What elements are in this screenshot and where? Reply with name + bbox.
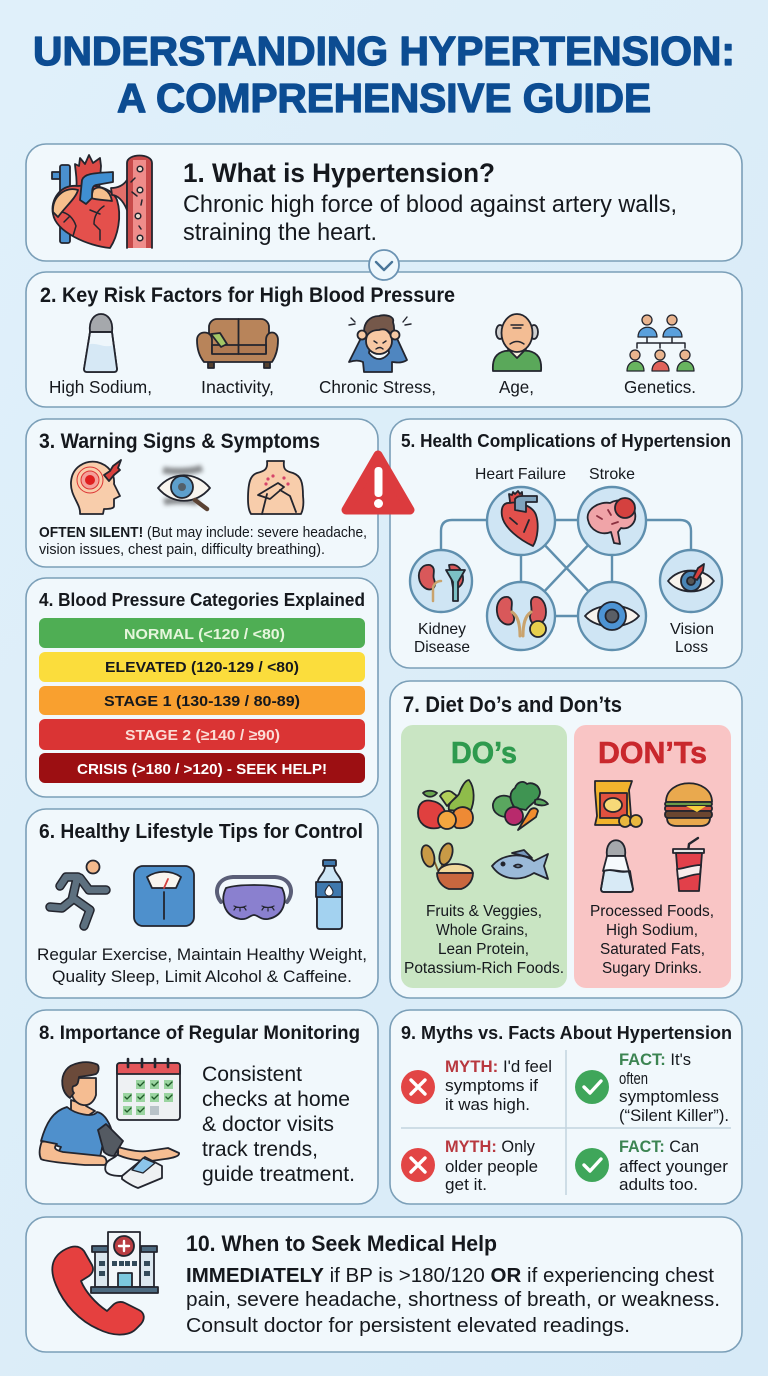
icon: person taking blood pressure bbox=[40, 1062, 179, 1188]
myth 2: older people bbox=[445, 1157, 538, 1176]
don'ts list: Processed Foods, bbox=[590, 903, 714, 920]
icon: chest pain bbox=[248, 461, 303, 514]
complication labels: Heart Failure bbox=[475, 466, 566, 483]
category bar: crisis bbox=[39, 753, 365, 783]
panel: key risk factors bbox=[26, 272, 742, 407]
category bar: stage 1: STAGE 1 (130-139 / 80-89) bbox=[104, 693, 300, 710]
title: A COMPREHENSIVE GUIDE bbox=[117, 75, 651, 121]
fact 1: FACT: It's bbox=[619, 1050, 691, 1069]
do's list: Fruits & Veggies, bbox=[426, 903, 542, 920]
node: eye bbox=[578, 582, 646, 650]
text block: Chronic high force of blood against artery walls, bbox=[183, 191, 677, 218]
heading: 10. When to Seek Medical Help bbox=[186, 1231, 497, 1256]
text block bbox=[183, 191, 677, 246]
icon: warning triangle bbox=[346, 455, 410, 510]
do's list bbox=[404, 903, 564, 977]
text block bbox=[39, 525, 367, 558]
panel: healthy lifestyle tips bbox=[26, 809, 378, 998]
icon: water bottle bbox=[316, 860, 342, 929]
node: kidneys bbox=[487, 582, 555, 650]
category bar: normal: NORMAL (<120 / <80) bbox=[124, 626, 285, 643]
heading: 5. Health Complications of Hypertension bbox=[401, 430, 731, 451]
text block: & doctor visits bbox=[202, 1113, 334, 1136]
complication labels bbox=[414, 466, 714, 656]
text block bbox=[186, 1265, 720, 1337]
icon: calendar bbox=[117, 1059, 180, 1120]
text block bbox=[37, 945, 367, 986]
icon: stressed person bbox=[349, 315, 411, 372]
fact 1: often bbox=[619, 1069, 648, 1088]
heading: 2. Key Risk Factors for High Blood Pressure bbox=[40, 284, 455, 307]
do's column bbox=[401, 725, 567, 988]
icon: vegetables bbox=[493, 782, 548, 830]
text block: straining the heart. bbox=[183, 219, 377, 246]
icon: burger bbox=[665, 783, 712, 826]
title: UNDERSTANDING HYPERTENSION: bbox=[33, 28, 735, 74]
title bbox=[33, 28, 735, 121]
node: vision loss bbox=[660, 550, 722, 612]
text block: Regular Exercise, Maintain Healthy Weight, bbox=[37, 945, 367, 964]
text block: Consult doctor for persistent elevated readings. bbox=[186, 1315, 630, 1337]
do's list: Whole Grains, bbox=[436, 922, 528, 939]
heading: 3. Warning Signs & Symptoms bbox=[39, 430, 320, 453]
icon: chips bbox=[595, 781, 642, 827]
don'ts column: DON’Ts bbox=[598, 735, 707, 770]
text block: guide treatment. bbox=[202, 1163, 355, 1186]
do's list: Lean Protein, bbox=[438, 941, 529, 958]
icon: soda cup bbox=[673, 838, 704, 891]
panel: when to seek medical help bbox=[26, 1217, 742, 1352]
myth 2: get it. bbox=[445, 1175, 487, 1194]
category bar: normal bbox=[39, 618, 365, 648]
myth 2 bbox=[401, 1137, 538, 1194]
don'ts list: Saturated Fats, bbox=[600, 941, 705, 958]
panel: warning signs bbox=[26, 419, 378, 567]
panel: health complications bbox=[390, 419, 742, 668]
icon: telephone handset bbox=[52, 1247, 144, 1335]
don'ts list bbox=[590, 903, 714, 977]
node: stroke bbox=[578, 487, 646, 555]
panel: myths vs facts bbox=[390, 1010, 742, 1204]
complication labels: Vision bbox=[670, 621, 714, 638]
complication labels: Stroke bbox=[589, 466, 635, 483]
text block: OFTEN SILENT! (But may include: severe headache, bbox=[39, 525, 367, 541]
text block: track trends, bbox=[202, 1138, 318, 1161]
text block: Consistent bbox=[202, 1063, 302, 1086]
icon: headache bbox=[71, 460, 121, 514]
heading: 9. Myths vs. Facts About Hypertension bbox=[401, 1022, 732, 1043]
icon: salt shaker bbox=[84, 314, 117, 372]
myth 1: it was high. bbox=[445, 1095, 530, 1114]
myth 1: symptoms if bbox=[445, 1076, 538, 1095]
category bar: elevated bbox=[39, 652, 365, 682]
icon: salt shaker bbox=[601, 840, 633, 892]
icon: grains and bowl bbox=[419, 842, 473, 889]
do's column: DO’s bbox=[451, 735, 517, 770]
connection diagram bbox=[410, 487, 722, 650]
icon: fruits bbox=[418, 780, 474, 829]
text block: pain, severe headache, shortness of breath, or weakness. bbox=[186, 1289, 720, 1311]
panel: regular monitoring bbox=[26, 1010, 378, 1204]
fact 1: (“Silent Killer”). bbox=[619, 1106, 729, 1125]
fact 2: adults too. bbox=[619, 1175, 698, 1194]
text block: checks at home bbox=[202, 1088, 350, 1111]
icon: hospital bbox=[91, 1232, 158, 1293]
icon: sofa bbox=[197, 319, 278, 368]
icon: older person bbox=[493, 314, 541, 371]
category bar: stage 2: STAGE 2 (≥140 / ≥90) bbox=[125, 727, 280, 744]
category bar: stage 1 bbox=[39, 686, 365, 715]
icon: runner bbox=[50, 860, 106, 926]
don'ts list: Sugary Drinks. bbox=[602, 960, 702, 977]
icon: heart and artery bbox=[52, 155, 152, 248]
heading: 6. Healthy Lifestyle Tips for Control bbox=[39, 820, 363, 843]
risk factor labels: Chronic Stress, bbox=[319, 377, 436, 397]
node: heart failure bbox=[487, 487, 555, 555]
risk factor labels: High Sodium, bbox=[49, 377, 152, 397]
myth 2: MYTH: Only bbox=[445, 1137, 535, 1156]
fact 2 bbox=[575, 1137, 728, 1194]
icon: weight scale bbox=[134, 866, 194, 926]
fact 2: FACT: Can bbox=[619, 1137, 699, 1156]
risk factor labels: Genetics. bbox=[624, 377, 696, 397]
text block: vision issues, chest pain, difficulty breathing). bbox=[39, 542, 325, 558]
panel: what is hypertension bbox=[26, 144, 742, 261]
icon: chevron connector bbox=[369, 250, 399, 280]
complication labels: Loss bbox=[675, 639, 708, 656]
text block: IMMEDIATELY if BP is >180/120 OR if experiencing chest bbox=[186, 1265, 714, 1287]
risk factor labels: Age, bbox=[499, 377, 534, 397]
fact 1 bbox=[575, 1050, 729, 1125]
complication labels: Disease bbox=[414, 639, 470, 656]
panel: blood pressure categories bbox=[26, 578, 378, 797]
heading: 4. Blood Pressure Categories Explained bbox=[39, 589, 365, 610]
icon: fish bbox=[492, 850, 548, 879]
fact 2: affect younger bbox=[619, 1157, 728, 1176]
complication labels: Kidney bbox=[418, 621, 466, 638]
myth 1 bbox=[401, 1057, 552, 1114]
myth 1: MYTH: I'd feel bbox=[445, 1057, 552, 1076]
don'ts column bbox=[574, 725, 731, 988]
risk factor labels bbox=[49, 377, 696, 397]
heading: 7. Diet Do’s and Don’ts bbox=[403, 692, 622, 717]
category bar: stage 2 bbox=[39, 719, 365, 750]
node: kidney disease bbox=[410, 550, 472, 612]
fact 1: symptomless bbox=[619, 1087, 719, 1106]
text block: Quality Sleep, Limit Alcohol & Caffeine. bbox=[52, 967, 352, 986]
text block bbox=[202, 1063, 355, 1186]
don'ts list: High Sodium, bbox=[606, 922, 698, 939]
do's list: Potassium-Rich Foods. bbox=[404, 960, 564, 977]
category bar: crisis: CRISIS (>180 / >120) - SEEK HELP! bbox=[77, 761, 327, 778]
heading: 8. Importance of Regular Monitoring bbox=[39, 1022, 360, 1044]
category bar: elevated: ELEVATED (120-129 / <80) bbox=[105, 659, 299, 676]
icon: sleep mask bbox=[217, 877, 291, 919]
panel: diet do's and don'ts bbox=[390, 681, 742, 998]
icon: blurred eye with magnifier bbox=[158, 468, 210, 509]
risk factor labels: Inactivity, bbox=[201, 377, 274, 397]
heading: 1. What is Hypertension? bbox=[183, 158, 495, 188]
icon: family tree bbox=[627, 315, 694, 371]
